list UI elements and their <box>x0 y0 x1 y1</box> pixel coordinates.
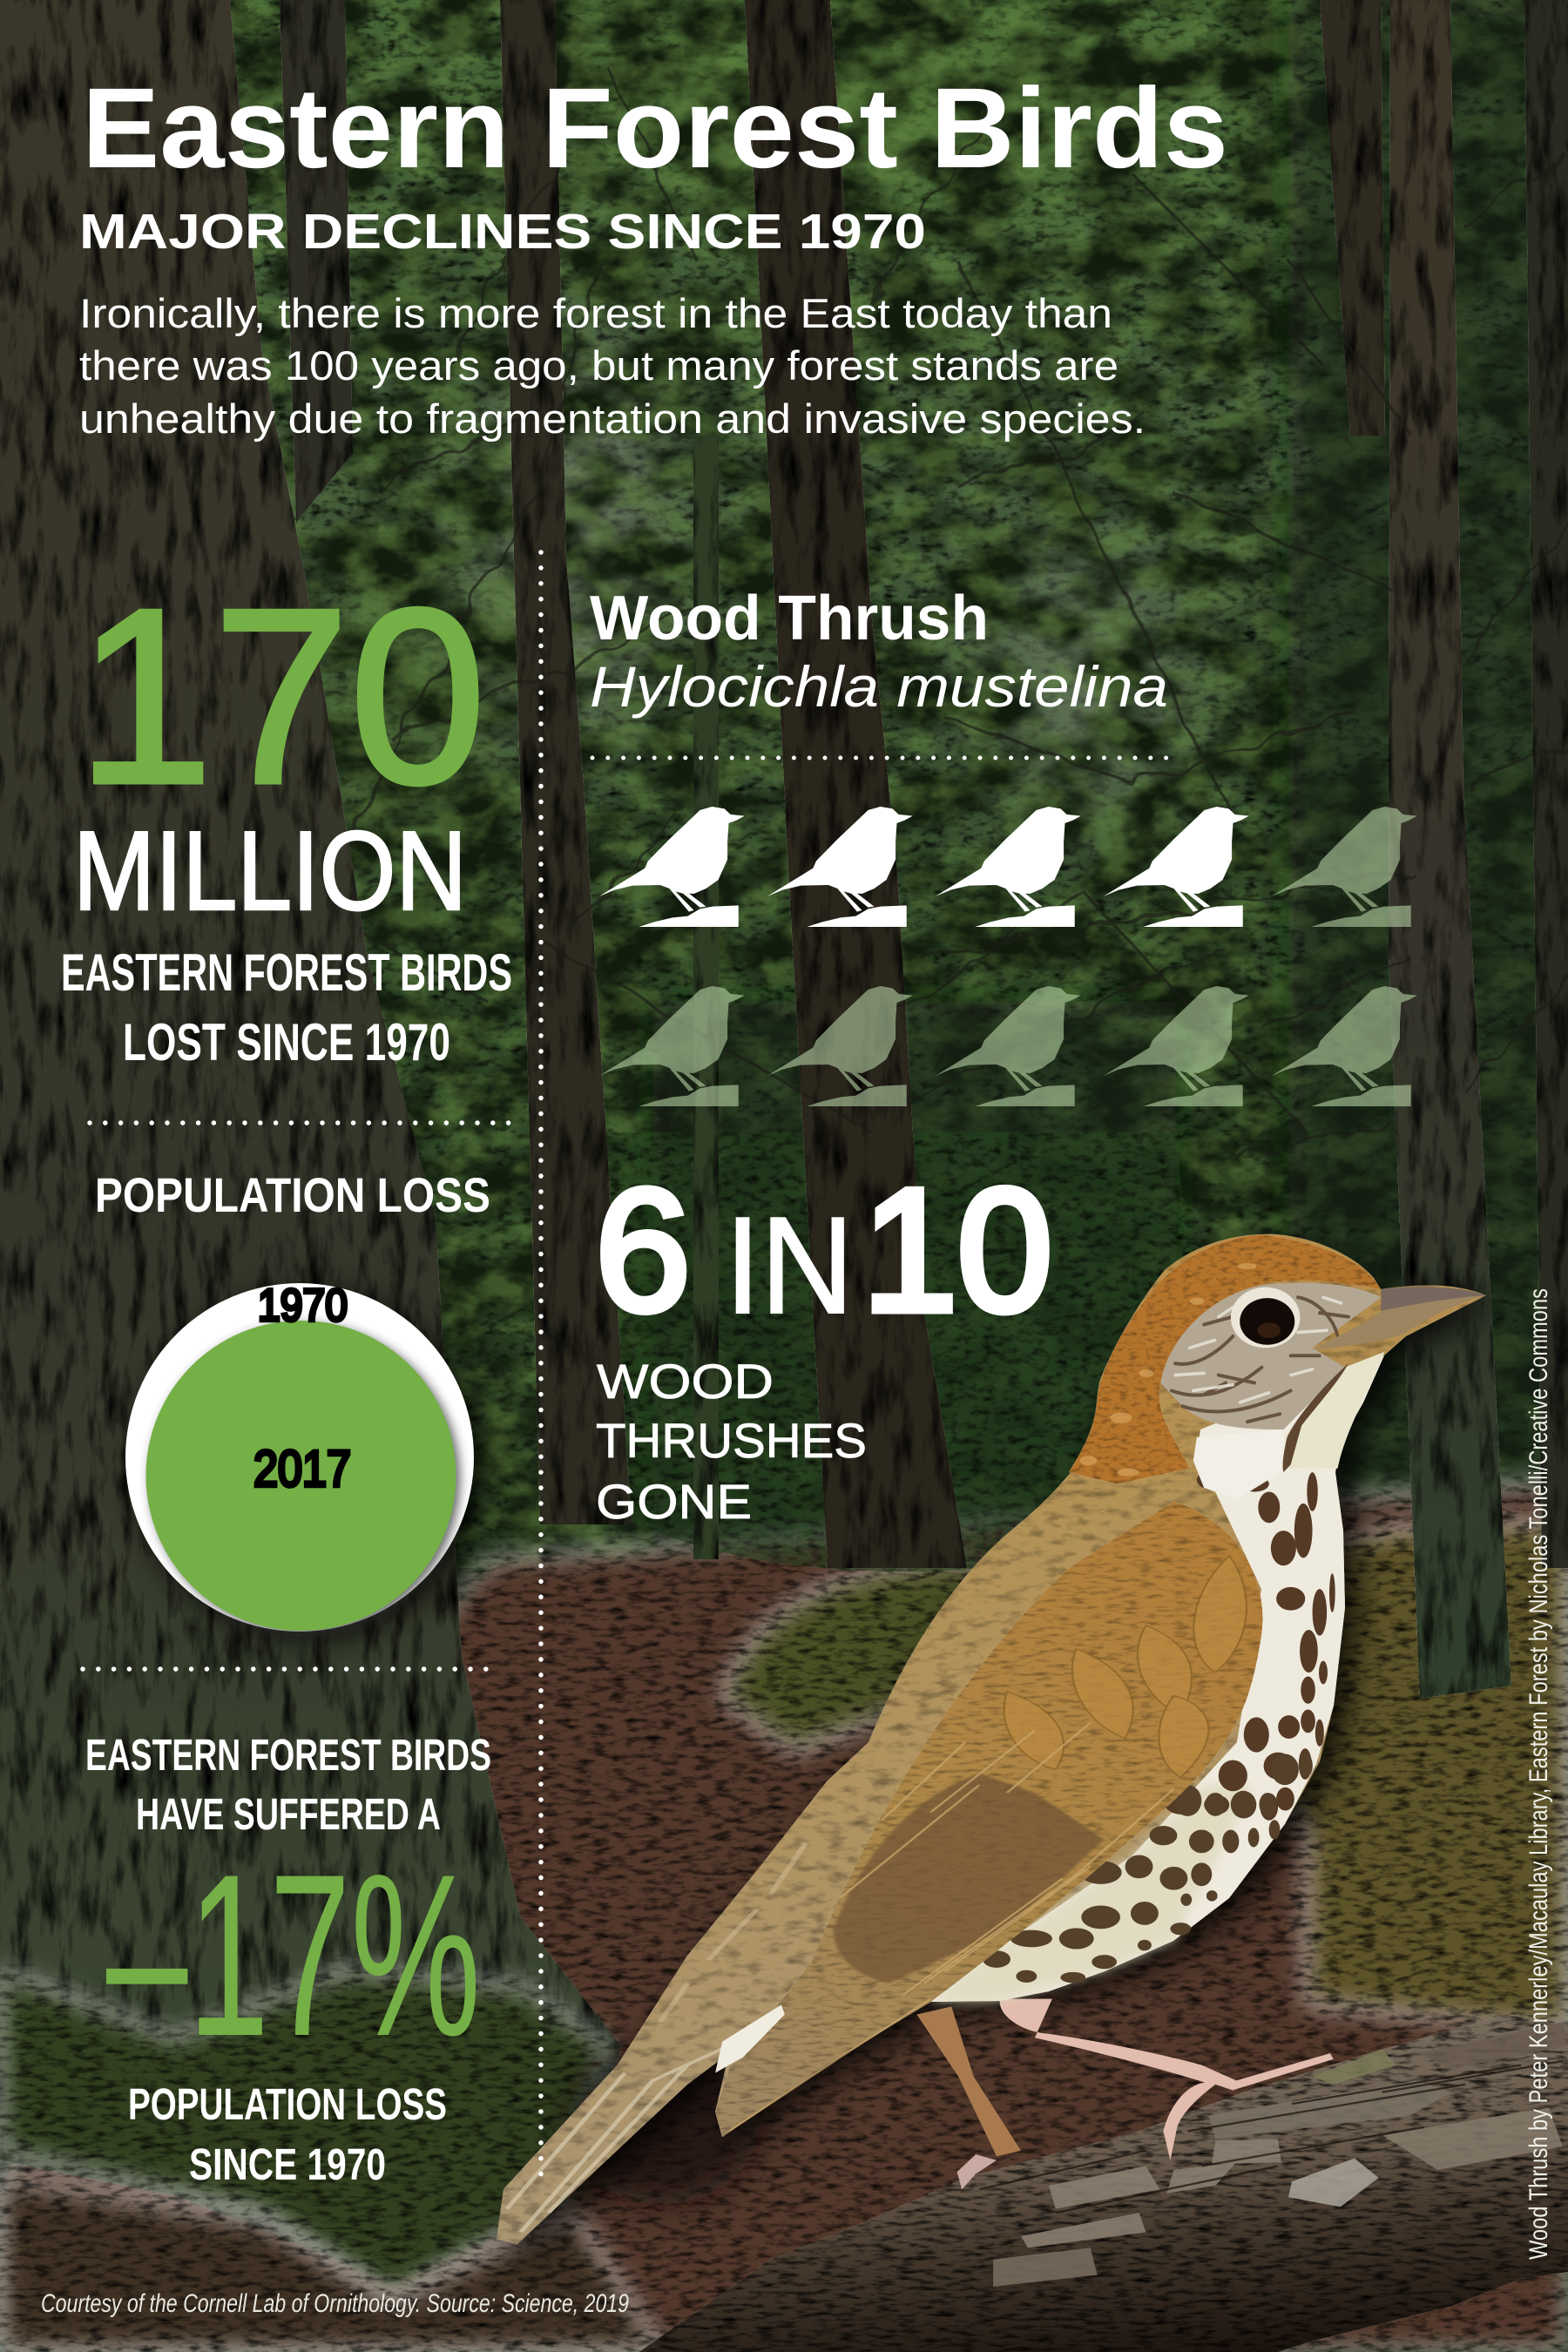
label 1970: 1970 <box>258 1281 348 1331</box>
ferns on right <box>1185 1524 1568 2030</box>
lead text: EASTERN FOREST BIRDS <box>85 1730 491 1780</box>
ferns on trail edge <box>723 1559 1028 1751</box>
dark root shadow beneath tail <box>566 2047 758 2204</box>
ground <box>0 1481 1568 2352</box>
distant trunks <box>280 0 1568 1699</box>
stat: -17 percent <box>85 1730 491 2189</box>
wing coverts scallops <box>1004 1556 1247 1777</box>
eye ring <box>1231 1288 1300 1348</box>
head <box>1069 1234 1486 1499</box>
stat: 170 million <box>61 557 512 1071</box>
photo credit: Wood Thrush by Peter Kennerley/Macaulay Library, Eastern Forest by Nicholas Tonelli/Creative Commons <box>1524 1288 1553 2260</box>
word IN: IN <box>725 1189 854 1342</box>
solid birds <box>599 807 1249 927</box>
legs <box>916 1999 1334 2189</box>
bird drop shadow <box>510 1243 1500 2253</box>
wing feather lines <box>729 1723 1173 2131</box>
word MILLION: MILLION <box>73 808 467 934</box>
species name <box>590 584 1168 719</box>
face <box>1160 1282 1381 1429</box>
title: Eastern Forest Birds <box>82 64 1228 192</box>
caption <box>61 943 512 1071</box>
caption: wood thrushes gone: THRUSHES <box>596 1413 867 1468</box>
stat: 6 in 10 <box>595 1153 1052 1348</box>
source note: Courtesy of the Cornell Lab of Ornithology. Source: Science, 2019 <box>41 2289 629 2318</box>
back highlights <box>659 1843 806 2022</box>
intro text: Ironically, there is more forest in the East today than <box>79 290 1112 336</box>
trailing text <box>128 2079 447 2189</box>
number 170: 170 <box>77 557 486 835</box>
caption: wood thrushes gone: WOOD <box>597 1354 774 1409</box>
white rump mark <box>715 2004 785 2072</box>
numeral 10: 10 <box>862 1153 1052 1348</box>
belly spots upper <box>1165 1470 1335 1821</box>
wood thrush bird <box>497 1234 1486 2244</box>
subtitle: MAJOR DECLINES SINCE 1970 <box>79 204 926 260</box>
circle shadow <box>134 1291 483 1639</box>
log <box>639 2014 1568 2352</box>
chart: population circles 1970 vs 2017 <box>125 1281 483 1639</box>
intro text: unhealthy due to fragmentation and invasive species. <box>79 395 1146 442</box>
conifer understory <box>592 1132 1202 1571</box>
breast <box>930 1355 1384 2002</box>
number -17%: –17% <box>106 1827 481 2085</box>
body <box>497 1234 1486 2244</box>
throat <box>1283 1352 1384 1469</box>
nape pale scales <box>1080 1263 1257 1477</box>
haze: pale light through trees <box>348 9 1176 1463</box>
caption: EASTERN FOREST BIRDS <box>61 943 512 1002</box>
wing <box>507 1501 1263 2232</box>
belly cream shading <box>930 1786 1254 2002</box>
dark streaks <box>1172 1297 1348 1422</box>
dark wing patch <box>834 1774 1105 1984</box>
lead text <box>85 1730 491 1839</box>
big left tree trunk <box>0 0 622 2282</box>
pictogram: 10 birds, 4 solid and 6 faded <box>599 807 1417 1106</box>
numeral 6: 6 <box>595 1153 691 1348</box>
tail pale stripes <box>507 2045 729 2232</box>
vertical dotted divider <box>538 552 544 2180</box>
lead text: HAVE SUFFERED A <box>136 1789 441 1839</box>
heading: population loss: POPULATION LOSS <box>95 1167 490 1222</box>
caption: LOST SINCE 1970 <box>123 1013 450 1071</box>
bark cracks <box>979 2061 1563 2213</box>
eye <box>1240 1298 1294 1345</box>
faded birds <box>599 807 1417 1106</box>
face streaks <box>1172 1297 1348 1422</box>
latin name: Hylocichla mustelina <box>590 654 1168 719</box>
pale streaks <box>1175 1297 1342 1402</box>
thin branches <box>331 70 1568 1159</box>
common name: Wood Thrush <box>590 584 989 653</box>
intro text <box>79 290 1146 442</box>
bark plates on log <box>993 2022 1568 2287</box>
neck patch <box>1193 1429 1288 1499</box>
trailing text: POPULATION LOSS <box>128 2079 447 2129</box>
darker dense conifers <box>653 0 1568 1568</box>
circle 1970 <box>125 1283 474 1632</box>
beak <box>1313 1287 1486 1350</box>
circle 2017 <box>146 1321 456 1631</box>
caption: wood thrushes gone: GONE <box>596 1474 752 1529</box>
caption: wood thrushes gone <box>596 1354 867 1529</box>
leaf litter lower left <box>0 2178 662 2352</box>
crown and nape <box>1069 1234 1381 1484</box>
moss at trunk base <box>0 1969 610 2300</box>
trailing text: SINCE 1970 <box>189 2139 386 2189</box>
belly spots lower <box>983 1754 1313 1983</box>
intro text: there was 100 years ago, but many forest stands are <box>79 342 1119 389</box>
label 2017: 2017 <box>253 1441 351 1497</box>
bright foliage patches <box>0 0 1568 1568</box>
malar stripe <box>1283 1363 1348 1472</box>
inner shadow <box>150 1324 460 1634</box>
